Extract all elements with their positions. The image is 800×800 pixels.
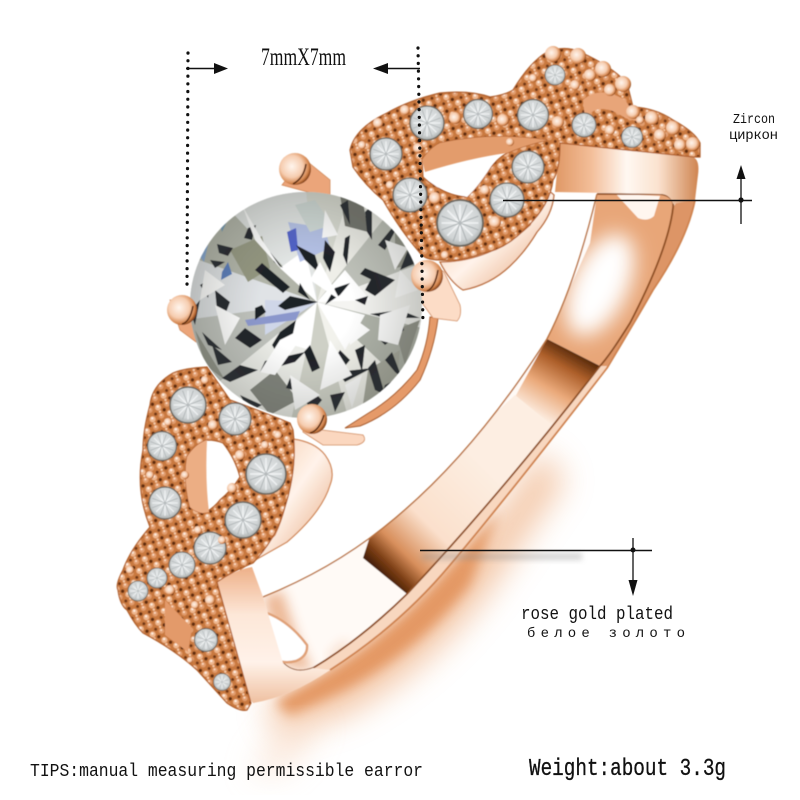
left arrow head	[214, 63, 228, 74]
right arrow head	[373, 63, 388, 74]
setting rim under the centre stone	[345, 317, 438, 428]
centre diamond	[190, 192, 422, 418]
size label: 7mmX7mm	[261, 44, 346, 71]
right arrow	[380, 68, 420, 70]
lower curved ribbon	[240, 439, 332, 570]
callout: zircon	[503, 112, 778, 224]
weight label: Weight:about 3.3g	[529, 756, 726, 783]
callout: zircon: циркон	[729, 128, 778, 144]
measurement: 7mm x 7mm	[186, 44, 423, 325]
prong balls	[167, 153, 443, 434]
ring band: inner surface	[263, 194, 673, 670]
diamond dark facets	[190, 200, 420, 412]
ring band: outer ribbon	[253, 200, 695, 703]
upper curved ribbon	[440, 190, 554, 290]
bead crown on the upper loop	[545, 46, 700, 151]
callout: zircon: Zircon	[733, 112, 775, 128]
small zircon stones	[128, 65, 642, 690]
diamond white sparkles	[200, 205, 418, 410]
right dotted guide	[418, 48, 423, 325]
callout: rose gold plated: rose gold plated	[521, 605, 673, 625]
ring band: inner rim lines	[263, 194, 673, 671]
front face of lower band	[217, 567, 330, 703]
front face of right band	[555, 143, 698, 204]
callout: rose gold plated: белое золото	[527, 625, 685, 642]
prong bases	[170, 158, 461, 445]
left arrow	[186, 68, 220, 70]
lower pave loop	[117, 367, 294, 710]
ring illustration	[117, 46, 700, 710]
soft band shadow	[250, 450, 565, 775]
upper pave loop	[350, 48, 700, 260]
inner hollow highlight	[267, 613, 307, 662]
left dotted guide	[187, 53, 188, 289]
gold beads between stones	[126, 74, 644, 663]
footnote: measuring tips: TIPS:manual measuring permissible earror	[30, 762, 423, 782]
callout: rose gold plated	[420, 538, 685, 642]
